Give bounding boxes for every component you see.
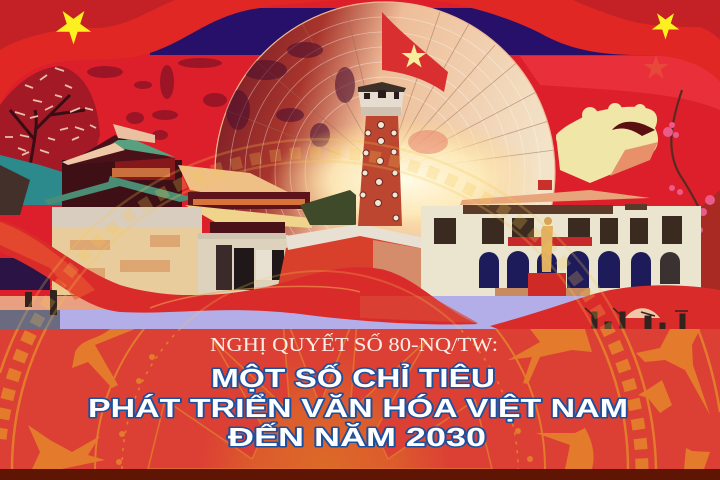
star left bbox=[56, 11, 91, 44]
bird motifs bbox=[28, 329, 710, 469]
left plum tree bbox=[0, 66, 100, 215]
memorial building bbox=[421, 180, 701, 304]
title bbox=[88, 363, 628, 452]
bottom dark strip bbox=[0, 469, 720, 480]
peach branch bbox=[663, 90, 720, 300]
background: red sky bbox=[0, 0, 720, 330]
drum pattern bbox=[0, 329, 720, 469]
subtitle: NGHỊ QUYẾT SỐ 80-NQ/TW: bbox=[210, 332, 498, 356]
citadel wall bbox=[52, 207, 288, 295]
golden overlay pattern bbox=[0, 139, 656, 469]
lavender stage strip bbox=[0, 258, 720, 330]
red ribbon wave right bbox=[360, 285, 720, 330]
red ribbon wave left to centre bbox=[0, 220, 478, 325]
title band bbox=[0, 329, 720, 469]
flag tower base bbox=[275, 224, 476, 300]
flag tower bbox=[358, 82, 406, 226]
dragon cloud bbox=[556, 103, 658, 183]
citadel pavilion bbox=[44, 124, 356, 236]
top red wave banner bbox=[0, 0, 720, 105]
title: ĐẾN NĂM 2030 bbox=[228, 422, 486, 452]
national flag on tower bbox=[382, 12, 448, 92]
faint sky star bbox=[644, 55, 668, 79]
title: PHÁT TRIỂN VĂN HÓA VIỆT NAM bbox=[88, 393, 628, 423]
statue on plinth bbox=[528, 217, 566, 303]
dancer silhouettes bbox=[25, 290, 688, 330]
star right bbox=[652, 13, 679, 39]
title: MỘT SỐ CHỈ TIÊU bbox=[211, 363, 495, 393]
fan dome backdrop bbox=[214, 1, 556, 238]
